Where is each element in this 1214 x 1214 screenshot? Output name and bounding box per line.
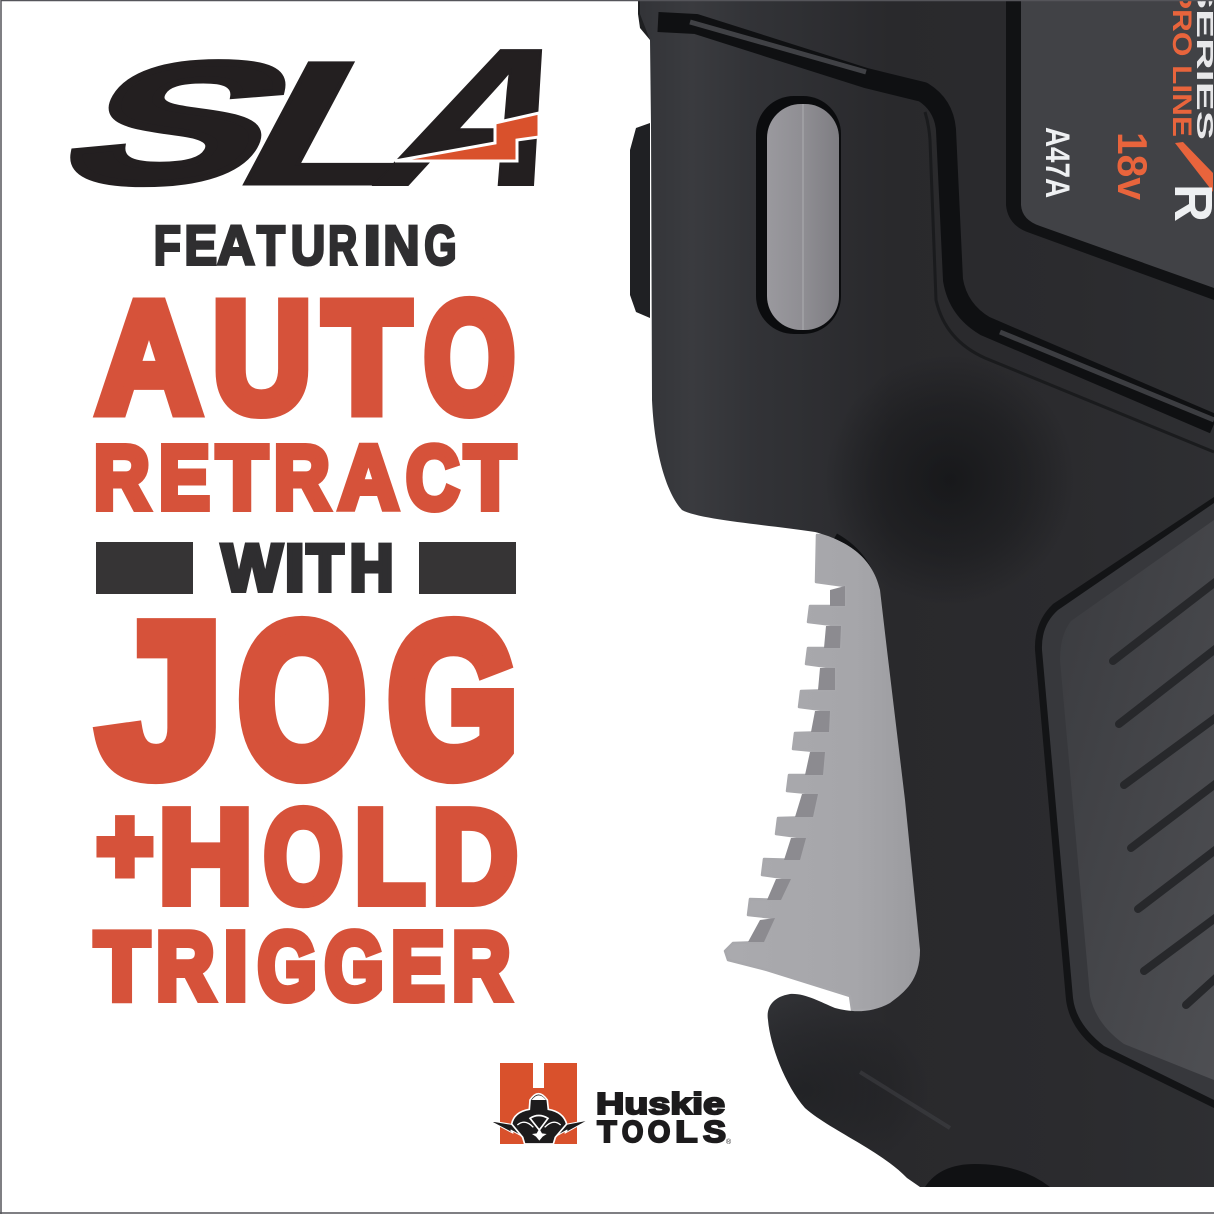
heading: FEATURING: I	[363, 214, 381, 276]
logo lightning bolt	[395, 113, 539, 161]
heading: JOG: O	[238, 579, 366, 820]
logo letter A: A	[347, 9, 627, 227]
heading: RETRACT: T	[465, 428, 515, 528]
heading: FEATURING: T	[257, 214, 285, 276]
label text: 18v: 18v	[1109, 132, 1156, 201]
heading: TRIGGER: R	[452, 913, 510, 1020]
wordmark TOOLS: O	[648, 1115, 670, 1149]
slot window	[756, 96, 841, 334]
right bar	[419, 542, 516, 594]
WITH label: W	[222, 530, 283, 604]
heading: AUTO: O	[424, 270, 515, 446]
wordmark Huskie: Huskie	[596, 1086, 725, 1121]
heading: +HOLD: H	[158, 783, 253, 930]
heading: RETRACT: C	[406, 428, 459, 528]
heading: FEATURING: E	[184, 214, 217, 276]
heading: FEATURING: N	[383, 214, 420, 276]
moulded groove	[658, 22, 1214, 452]
heading: TRIGGER	[95, 913, 510, 1020]
heading: TRIGGER: E	[391, 913, 444, 1020]
heading: AUTO: A	[97, 270, 201, 446]
WITH label: H	[350, 530, 394, 604]
wordmark TOOLS: T	[597, 1115, 617, 1149]
handle body	[620, 0, 1214, 1190]
worker emblem	[489, 1094, 589, 1144]
heading: FEATURING: F	[154, 214, 181, 276]
label text: A47A: A47A	[1038, 127, 1076, 198]
heading: RETRACT: A	[338, 428, 398, 528]
heading: FEATURING: U	[291, 214, 325, 276]
heading: +HOLD	[97, 783, 518, 930]
heading: RETRACT: E	[159, 428, 210, 528]
WITH label: I	[285, 530, 305, 604]
heading: +HOLD: +	[97, 788, 153, 905]
heading: TRIGGER: R	[156, 913, 214, 1020]
heading: +HOLD: L	[354, 783, 425, 930]
heading: FEATURING: G	[424, 214, 456, 276]
heading: RETRACT: T	[217, 428, 267, 528]
WITH label	[222, 530, 394, 604]
registered mark: ®	[726, 1138, 732, 1146]
wordmark TOOLS	[597, 1115, 726, 1149]
heading: TRIGGER: G	[325, 913, 384, 1020]
heading: TRIGGER: G	[258, 913, 317, 1020]
logo letter S: S	[30, 28, 332, 219]
H mark	[500, 1063, 577, 1144]
heading: RETRACT: R	[274, 428, 330, 528]
grip pad	[1035, 497, 1214, 1108]
heading: AUTO: T	[324, 270, 410, 446]
heading: JOG	[99, 579, 518, 820]
logo: Huskie Tools	[489, 1063, 732, 1149]
heading: +HOLD: D	[432, 783, 518, 930]
divider with WITH	[96, 530, 516, 604]
heading: JOG: G	[388, 579, 518, 820]
heading: AUTO: U	[213, 270, 311, 446]
side button	[630, 123, 650, 318]
heading: FEATURING: R	[328, 214, 357, 276]
heading: FEATURING	[154, 214, 456, 276]
wordmark TOOLS: O	[622, 1115, 643, 1149]
base foot detail	[925, 1164, 1050, 1187]
shading on handle	[768, 401, 1030, 1143]
product photo: tool handle close-up	[620, 0, 1214, 1190]
top corner nub	[638, 0, 660, 40]
logo letter L: L	[206, 25, 489, 221]
heading: TRIGGER: T	[95, 913, 149, 1020]
grip ribs	[1113, 580, 1214, 1005]
label plate	[1006, 0, 1214, 300]
heading: RETRACT	[94, 428, 515, 528]
heading: RETRACT: R	[94, 428, 150, 528]
trigger	[725, 535, 925, 1010]
trigger seam	[834, 534, 874, 572]
heading: AUTO	[97, 270, 515, 446]
label slash mark	[1175, 142, 1213, 192]
heading: JOG: J	[99, 579, 223, 820]
left bar	[96, 542, 193, 594]
heading: FEATURING: A	[217, 214, 255, 276]
heading: TRIGGER: I	[224, 913, 248, 1020]
WITH label: T	[307, 530, 343, 604]
wordmark TOOLS: L	[675, 1115, 698, 1149]
wordmark TOOLS: S	[703, 1115, 726, 1149]
heading: +HOLD: O	[264, 783, 343, 930]
logo: SLA	[30, 9, 627, 227]
